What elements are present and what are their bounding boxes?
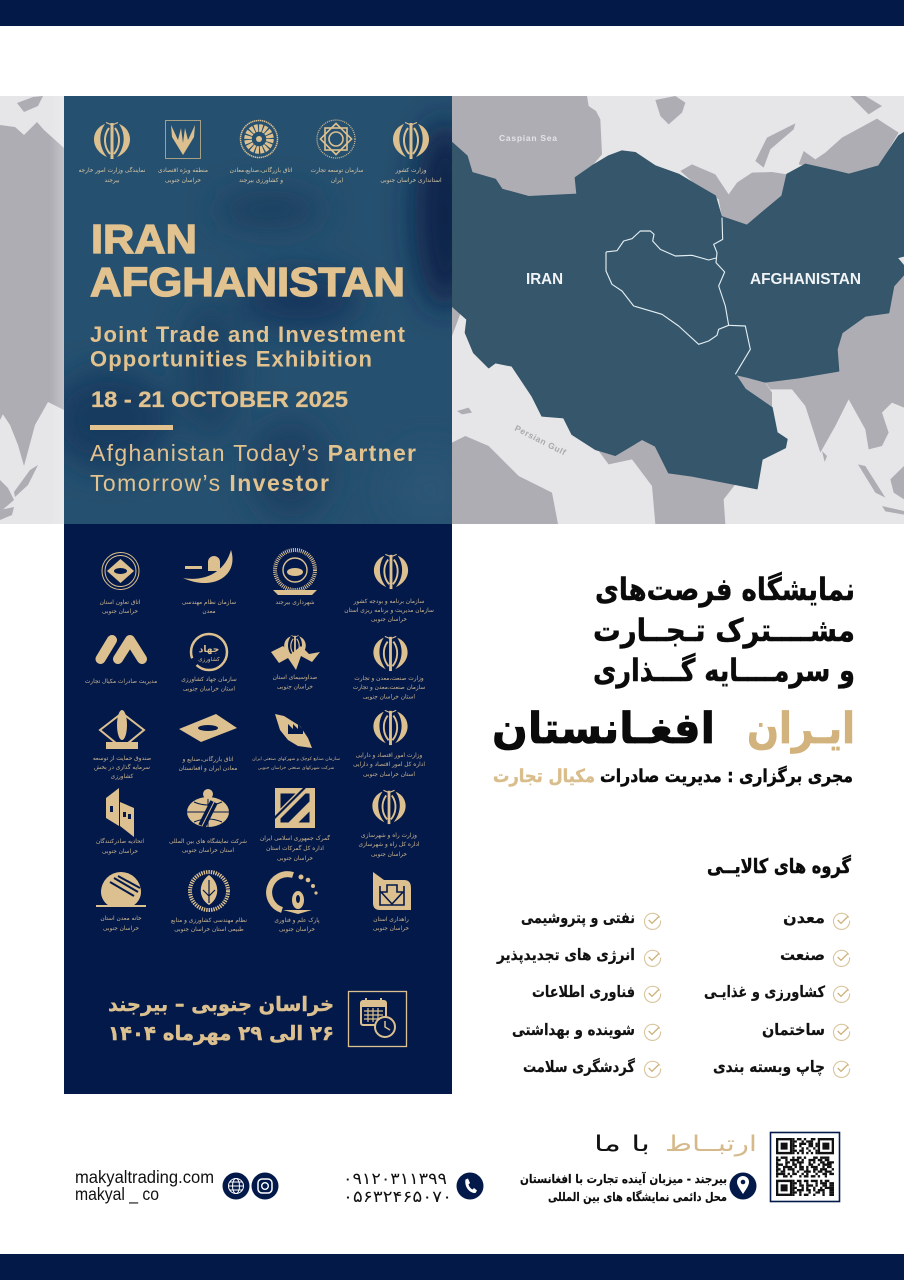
- icon: phone: [456, 1172, 484, 1200]
- item: printing and packaging: چاپ وبسته بندی: [713, 1058, 825, 1077]
- logo: special economic zone: [158, 120, 208, 184]
- logo: ministry of interior: وزارت کشور: [394, 167, 427, 174]
- logo: foreign ministry representative: بیرجند: [105, 178, 120, 184]
- logo: agriculture fund: [93, 710, 151, 780]
- panel: blue upper header: [50, 96, 475, 530]
- organizer line: [493, 765, 853, 787]
- logo: foreign ministry representative: [78, 122, 146, 184]
- subtitle: Opportunities Exhibition: [90, 346, 372, 372]
- logo: agriculture jihad: جهاد: [199, 645, 219, 655]
- logo: IRIB: خراسان جنوبی: [277, 684, 313, 690]
- logo: international exhibitions company: [169, 789, 247, 854]
- right heading: exhibition title: [593, 571, 855, 689]
- logo: science park: پارک علم و فناوری: [274, 916, 320, 924]
- title: Iran Afghanistan: IRAN: [91, 216, 197, 262]
- item: mining: [783, 909, 850, 929]
- logo: special economic zone: منطقه ویژه اقتصادی: [158, 168, 208, 174]
- icon: location pin: [730, 1172, 756, 1200]
- logo: planning organization: سازمان مدیریت و برنامه ریزی استان: [344, 608, 434, 614]
- logo: industrial towns: [252, 714, 340, 771]
- item: oil and petrochemicals: نفتی و پتروشیمی: [521, 909, 635, 928]
- divider rule: [90, 425, 173, 430]
- map label: Caspian Sea: Caspian Sea: [499, 133, 557, 143]
- logo: ministry of industry: استان خراسان جنوبی: [363, 694, 415, 700]
- logo: ministry of interior: [380, 122, 442, 184]
- website and social handle: makyal _ co: [75, 1184, 159, 1205]
- logo: planning organization: [344, 554, 434, 623]
- icon: globe: [222, 1172, 250, 1200]
- logo: international exhibitions company: شرکت نمایشگاه های بین المللی: [169, 837, 247, 845]
- organizer line: مکیال تجارت: [493, 766, 595, 787]
- subtitle: [90, 322, 406, 372]
- panel edge highlight: [56, 141, 64, 410]
- logo: mining house: خراسان جنوبی: [103, 926, 139, 932]
- logo: ministry of interior: استانداری خراسان جنوبی: [380, 178, 442, 184]
- right heading: Iran Afghanistan in Persian: افغـانستان: [492, 704, 715, 754]
- logo: ministry of industry: وزارت صنعت،معدن و تجارت: [354, 676, 424, 682]
- logo: Makyal trading: [85, 640, 157, 685]
- website and social handle: [75, 1167, 214, 1205]
- QR code: [770, 1132, 840, 1202]
- map label: Iran: IRAN: [526, 271, 563, 288]
- item: renewable energy: انرژی های تجدیدپذیر: [496, 946, 635, 965]
- logo: exporters union: [96, 788, 144, 855]
- logo: cooperative chamber: [100, 552, 141, 615]
- left land masses: [0, 96, 64, 520]
- title: Iran Afghanistan: [90, 216, 405, 305]
- phone numbers: [343, 1169, 452, 1206]
- logo: ministry of roads: وزارت راه و شهرسازی: [361, 833, 417, 839]
- item: construction: ساختمان: [762, 1021, 825, 1039]
- logo: mining engineering: معدن: [202, 609, 216, 615]
- panel: navy lower: [64, 524, 452, 1094]
- right heading: Iran Afghanistan in Persian: [492, 704, 855, 754]
- right heading: exhibition title: نمایشگاه فرصت‌های: [595, 571, 855, 608]
- logo: chamber of commerce: [230, 120, 293, 184]
- logo: ministry of economy: وزارت امور اقتصاد و دارایی: [356, 753, 423, 759]
- logo: planning organization: خراسان جنوبی: [371, 617, 407, 623]
- map: gray neighbours: [452, 96, 904, 524]
- exhibition date and place in Persian: خراسان جنوبی – بیرجند: [108, 992, 334, 1016]
- logo: ministry of roads: [358, 790, 420, 858]
- item: agriculture and food: کشاورزی و غذایـی: [704, 983, 826, 1001]
- logo: Birjand municipality: [273, 550, 317, 606]
- logo: science park: خراسان جنوبی: [279, 927, 315, 933]
- item: detergents and hygiene: شوینده و بهداشتی: [512, 1021, 635, 1039]
- logo: planning organization: سازمان برنامه و بودجه کشور: [353, 598, 425, 605]
- logo: road maintenance: خراسان جنوبی: [373, 926, 409, 932]
- title: Iran Afghanistan: AFGHANISTAN: [90, 259, 405, 305]
- header logos row: [78, 120, 442, 184]
- contact heading: [594, 1132, 757, 1157]
- logo: chamber of commerce: اتاق بازرگانی،صنایع،معادن: [230, 166, 293, 174]
- logo: industrial towns: شرکت شهرکهای صنعتی خراسان جنوبی: [258, 765, 334, 771]
- logo: ministry of industry: [353, 636, 425, 700]
- exhibition date and place in Persian: ۲۶ الی ۲۹ مهرماه ۱۴۰۴: [108, 1021, 334, 1045]
- tagline: Tomorrow’s Investor: [90, 470, 329, 496]
- logo: ministry of roads: اداره کل راه و شهرسازی: [358, 841, 420, 848]
- phone numbers: ۰۹۱۲۰۳۱۱۳۹۹: [343, 1169, 447, 1188]
- logo: customs: [260, 788, 330, 862]
- logo: science park: [269, 874, 320, 933]
- logo: industrial towns: سازمان صنایع کوچک و شهرکهای صنعتی ایران: [252, 756, 340, 762]
- logo: ministry of roads: خراسان جنوبی: [371, 852, 407, 858]
- logo: mining house: خانه معدن استان: [100, 916, 142, 922]
- website and social handle: makyaltrading.com: [75, 1167, 214, 1187]
- logo: exporters union: خراسان جنوبی: [102, 849, 138, 855]
- logo: Iran Afghanistan chamber: اتاق بازرگانی،صنایع و: [182, 755, 234, 763]
- logo: special economic zone: خراسان جنوبی: [165, 178, 201, 184]
- contact heading: ارتبــاط: [665, 1132, 757, 1157]
- logo: IRIB: [271, 636, 320, 690]
- product group list: [496, 909, 850, 1077]
- logo: agriculture jihad: استان خراسان جنوبی: [183, 686, 235, 692]
- logo: Iran Afghanistan chamber: معادن ایران و افغانستان: [179, 766, 237, 772]
- logo: customs: گمرک جمهوری اسلامی ایران: [260, 834, 330, 842]
- logo: agriculture jihad: سازمان جهاد کشاورزی: [181, 676, 237, 683]
- map label: Persian Gulf: Persian Gulf: [513, 423, 568, 457]
- logo: agriculture fund: صندوق حمایت از توسعه: [93, 756, 151, 762]
- logo: ministry of industry: سازمان صنعت،معدن و تجارت: [353, 685, 425, 691]
- logo: ministry of economy: استان خراسان جنوبی: [363, 772, 415, 778]
- date: 18 - 21 OCTOBER 2025: [91, 387, 348, 412]
- bottom bar: [0, 1254, 904, 1280]
- item: health tourism: گردشگری سلامت: [523, 1057, 636, 1076]
- logo: agriculture fund: کشاورزی: [111, 773, 134, 780]
- organizer line: مجری برگزاری : مدیریت صادرات: [600, 765, 853, 787]
- logo: agriculture engineering: [171, 872, 247, 933]
- logo: foreign ministry representative: نمایندگی وزارت امور خارجه: [78, 166, 146, 174]
- address: بیرجند - میزبان آینده تجارت با افغانستان: [520, 1171, 727, 1186]
- heading: product groups: گروه های کالایــی: [707, 854, 851, 878]
- right heading: Iran Afghanistan in Persian: ایـران: [747, 704, 855, 754]
- logo: mining engineering: [182, 550, 236, 615]
- item: mining: معدن: [783, 909, 825, 927]
- right heading: exhibition title: مشــــترک تـجــارت: [593, 613, 855, 649]
- exhibition date and place in Persian: [108, 992, 334, 1045]
- map: Iran: [452, 143, 787, 489]
- logo: trade promotion organization: سازمان توسعه تجارت: [311, 168, 364, 174]
- logo: IRIB: صداوسیمای استان: [273, 675, 317, 681]
- logo: Makyal trading: مدیریت صادرات مکیال تجارت: [85, 678, 157, 685]
- logo: chamber of commerce: و کشاورزی بیرجند: [239, 177, 283, 184]
- right heading: exhibition title: و سرمــــایه گـــذاری: [593, 652, 855, 689]
- address: [520, 1171, 727, 1204]
- logo: trade promotion organization: [311, 120, 364, 184]
- logo: trade promotion organization: ایران: [331, 178, 344, 184]
- logo: road maintenance: [373, 872, 411, 932]
- logo: agriculture jihad: [181, 634, 237, 692]
- tagline: Afghanistan Today’s Partner: [90, 440, 416, 466]
- logo: customs: خراسان جنوبی: [277, 856, 313, 862]
- map: highlighted province and border: [606, 218, 750, 374]
- logo: mining house: [96, 872, 146, 932]
- logo: cooperative chamber: اتاق تعاون استان: [100, 600, 141, 606]
- top bar: [0, 0, 904, 26]
- logo: agriculture engineering: طبیعی استان خراسان جنوبی: [174, 927, 244, 933]
- logo: exporters union: اتحادیه صادرکنندگان: [96, 837, 144, 845]
- phone numbers: ۰۵۶۳۲۴۶۵۰۷۰: [343, 1187, 452, 1206]
- logo: customs: اداره کل گمرکات استان: [266, 844, 324, 852]
- logo: cooperative chamber: خراسان جنوبی: [102, 609, 138, 615]
- logo: Iran Afghanistan chamber: [179, 714, 237, 772]
- icon: instagram: [252, 1172, 278, 1200]
- icon: calendar and clock: [348, 992, 406, 1046]
- logo: international exhibitions company: استان خراسان جنوبی: [182, 848, 234, 854]
- tagline: [90, 440, 416, 496]
- map band background: [0, 96, 904, 524]
- logo: ministry of economy: اداره کل امور اقتصاد و دارایی: [353, 761, 425, 768]
- map: Afghanistan: [714, 133, 904, 382]
- logo: Birjand municipality: شهرداری بیرجند: [275, 600, 315, 606]
- item: industry: صنعت: [780, 946, 825, 964]
- logo: agriculture fund: سرمایه گذاری در بخش: [94, 763, 150, 771]
- logo: agriculture jihad: کشاورزی: [198, 656, 220, 663]
- address: محل دائمی نمایشگاه های بین المللی: [548, 1190, 727, 1204]
- subtitle: Joint Trade and Investment: [90, 322, 406, 347]
- partner logos grid: [85, 550, 434, 933]
- map label: Afghanistan: AFGHANISTAN: [750, 271, 861, 288]
- logo: agriculture engineering: نظام مهندسی کشاورزی و منابع: [171, 917, 247, 924]
- logo: ministry of economy: [353, 710, 425, 778]
- logo: road maintenance: راهداری استان: [373, 917, 409, 923]
- contact heading: با ما: [594, 1132, 650, 1157]
- logo: mining engineering: سازمان نظام مهندسی: [182, 600, 236, 606]
- item: information technology: فناوری اطلاعات: [532, 983, 635, 1001]
- item: industry: [780, 946, 850, 966]
